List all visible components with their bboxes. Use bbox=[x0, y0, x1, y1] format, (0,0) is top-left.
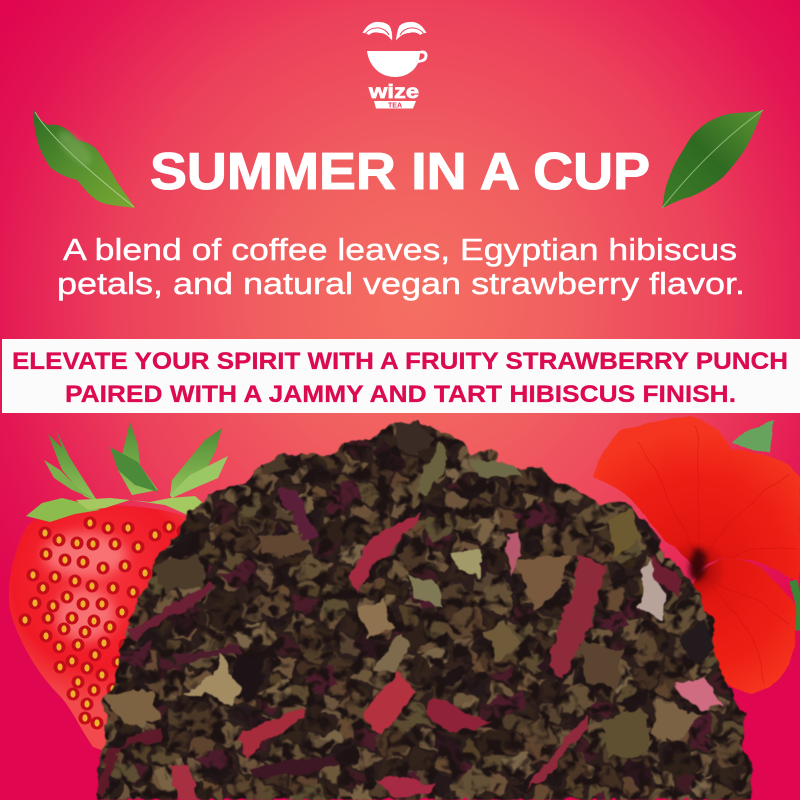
strawberry calyx bbox=[26, 422, 228, 522]
description text bbox=[57, 232, 745, 301]
description line 2: petals, and natural vegan strawberry flavor. bbox=[57, 266, 745, 301]
strawberry body bbox=[9, 505, 210, 760]
pile second flake layer bbox=[90, 415, 760, 800]
banner line 1: ELEVATE YOUR SPIRIT WITH A FRUITY STRAWBERRY PUNCH bbox=[12, 348, 788, 375]
wordmark band: tea bbox=[374, 101, 416, 108]
icon: left green leaf bbox=[34, 110, 135, 208]
green leaf behind flower bbox=[732, 420, 773, 452]
strawberry highlights bbox=[43, 533, 127, 641]
pile dark shadows bbox=[90, 415, 760, 800]
strawberry bbox=[9, 422, 228, 760]
green leaf right bbox=[788, 578, 800, 630]
petal bottom bbox=[693, 557, 796, 695]
description line 1: A blend of coffee leaves, Egyptian hibiscus bbox=[63, 232, 737, 267]
tea leaf pile bbox=[90, 415, 760, 800]
wordmark: tea label: TEA bbox=[388, 102, 402, 109]
dried tea flakes bbox=[100, 420, 715, 760]
banner background bbox=[2, 339, 800, 413]
icon: right green leaf bbox=[662, 110, 763, 208]
hibiscus petal pieces bbox=[95, 490, 723, 800]
hibiscus flower bbox=[593, 417, 800, 695]
petal right bbox=[687, 449, 800, 580]
strawberry seeds bbox=[18, 516, 190, 730]
pale curled tea leaf bbox=[185, 653, 240, 703]
flower throat bbox=[689, 547, 705, 583]
wordmark: wize: wize bbox=[368, 82, 419, 103]
banner bbox=[2, 339, 800, 413]
leaf highlight bbox=[53, 126, 97, 170]
petal top bbox=[593, 417, 730, 570]
banner line 2: PAIRED WITH A JAMMY AND TART HIBISCUS FINISH. bbox=[65, 381, 736, 408]
icon: right eyebrow leaf bbox=[396, 22, 426, 40]
icon: smiling cup bbox=[367, 50, 428, 77]
petal veins bbox=[640, 425, 798, 685]
pile texture bbox=[90, 415, 760, 800]
title: SUMMER IN A CUP bbox=[150, 143, 650, 201]
icon: left eyebrow leaf bbox=[362, 22, 392, 40]
logo: wize tea bbox=[362, 22, 428, 109]
